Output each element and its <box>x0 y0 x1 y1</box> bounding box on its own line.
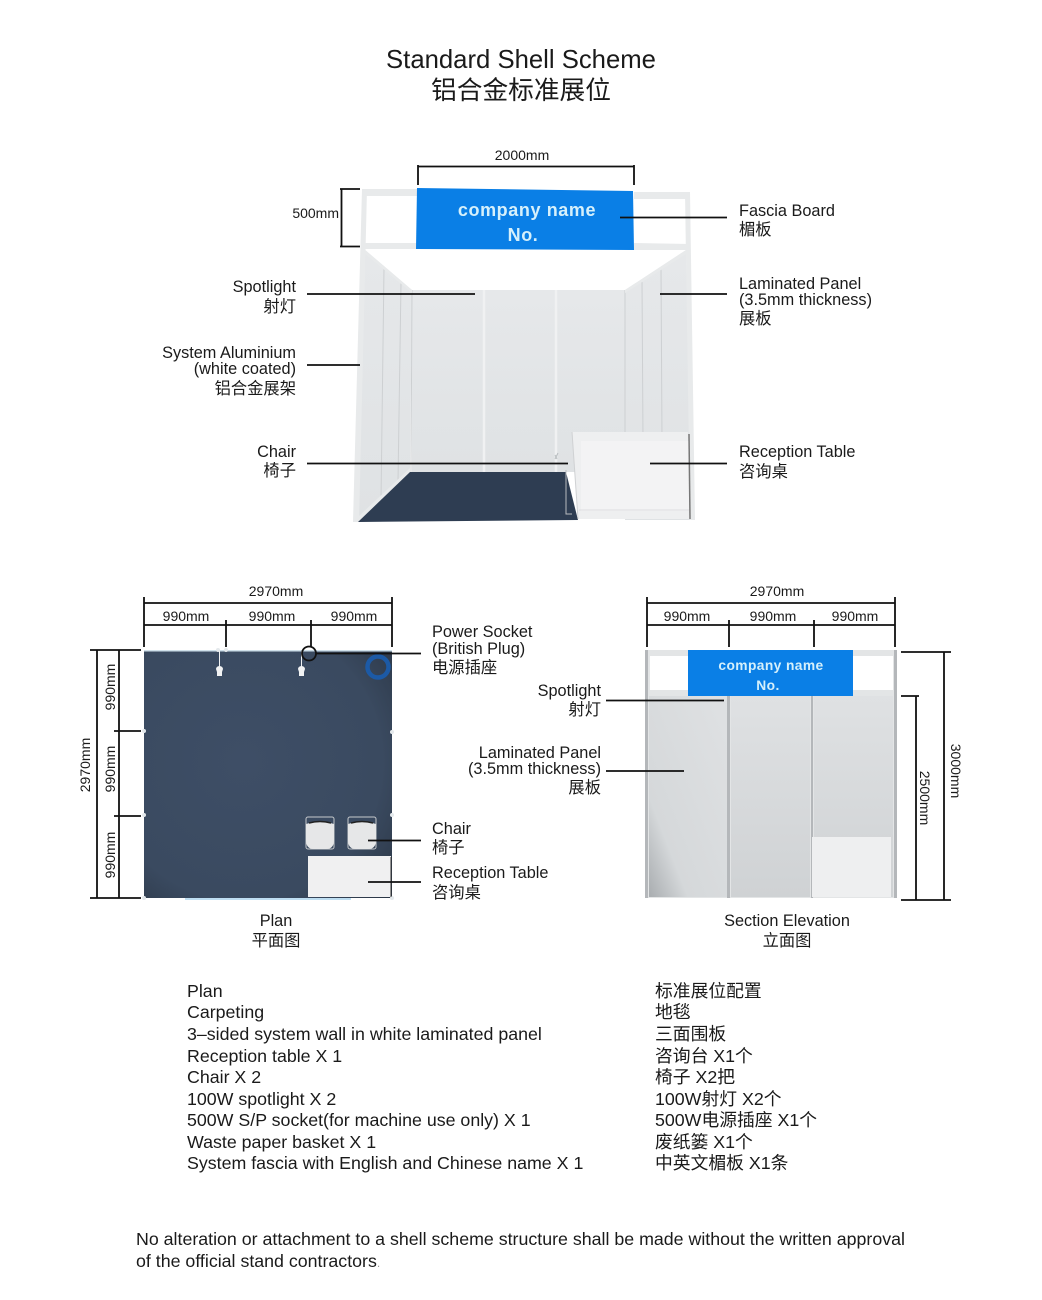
dimension: 2000mm <box>418 147 634 185</box>
dimension: 500mm <box>292 189 360 246</box>
plan caption <box>252 912 300 950</box>
chinese specification list: 废纸篓 X1个 <box>655 1132 753 1152</box>
footer note: No alteration or attachment to a shell scheme structure shall be made without the written approval <box>136 1229 905 1249</box>
label: fascia board: Fascia Board <box>739 202 835 220</box>
english specification list: Chair X 2 <box>187 1067 261 1087</box>
elevation fascia <box>688 650 853 696</box>
label: reception table <box>650 443 855 481</box>
label: power socket: (British Plug) <box>432 640 525 658</box>
elevation right dimensions <box>901 652 964 900</box>
label: system aluminium: 铝合金展架 <box>215 380 296 398</box>
label: chair: 椅子 <box>263 462 296 480</box>
chinese specification list: 椅子 X2把 <box>655 1067 735 1087</box>
label: elevation spotlight: Spotlight <box>538 682 601 700</box>
elevation right dimensions: 2500mm <box>917 771 933 825</box>
aluminium frame <box>353 189 695 522</box>
english specification list: Waste paper basket X 1 <box>187 1132 376 1152</box>
label: plan reception table: Reception Table <box>432 864 548 882</box>
elevation top dimensions: 990mm <box>832 608 878 624</box>
title: Standard Shell Scheme <box>386 46 656 74</box>
label: system aluminium <box>162 344 360 398</box>
label: fascia board: 楣板 <box>739 221 772 239</box>
plan top dimensions: 2970mm <box>249 583 303 599</box>
carpet <box>144 650 392 898</box>
label: laminated panel: (3.5mm thickness) <box>739 291 872 309</box>
label: power socket: Power Socket <box>432 623 533 641</box>
chinese specification list: 地毯 <box>655 1002 691 1022</box>
back wall <box>412 290 625 472</box>
plan top dimensions: 990mm <box>163 608 209 624</box>
elevation top dimensions: 2970mm <box>750 583 804 599</box>
fascia board banner: No. <box>508 225 538 245</box>
label: reception table: Reception Table <box>739 443 855 461</box>
chinese specification list: 标准展位配置 <box>655 981 762 1001</box>
elevation caption: Section Elevation <box>724 912 850 930</box>
title: 铝合金标准展位 <box>431 76 611 105</box>
plan left dimensions: 990mm <box>102 746 118 792</box>
label: elevation laminated panel: 展板 <box>568 779 601 797</box>
chinese specification list: 中英文楣板 X1条 <box>655 1153 789 1173</box>
label: plan reception table: 咨询桌 <box>432 884 481 902</box>
title <box>386 46 656 105</box>
label: laminated panel <box>660 275 872 328</box>
section elevation drawing: No. <box>756 678 780 693</box>
plan top dimensions: 990mm <box>249 608 295 624</box>
elevation caption <box>724 912 850 950</box>
elevation table <box>812 837 891 897</box>
plan left dimensions <box>77 650 141 898</box>
english specification list: Carpeting <box>187 1002 264 1022</box>
label: power socket: 电源插座 <box>432 659 497 677</box>
label: fascia board <box>620 202 835 239</box>
label: plan chair: 椅子 <box>432 839 465 857</box>
elevation right dimensions: 3000mm <box>948 744 964 798</box>
label: plan chair <box>368 820 471 857</box>
chinese specification list: 咨询台 X1个 <box>655 1046 753 1066</box>
chinese specification list: 100W射灯 X2个 <box>655 1089 782 1109</box>
plan caption: 平面图 <box>252 932 300 950</box>
plan top dimensions: 990mm <box>331 608 377 624</box>
chair right <box>348 817 376 849</box>
english specification list: 500W S/P socket(for machine use only) X 1 <box>187 1110 531 1130</box>
label: elevation laminated panel: Laminated Panel <box>479 744 601 762</box>
english specification list: System fascia with English and Chinese name X 1 <box>187 1153 583 1173</box>
panels <box>649 696 727 897</box>
label: elevation spotlight: 射灯 <box>568 701 601 719</box>
english specification list: Reception table X 1 <box>187 1046 342 1066</box>
label: laminated panel: 展板 <box>739 310 772 328</box>
elevation caption: 立面图 <box>763 932 811 950</box>
label: spotlight: 射灯 <box>263 298 296 316</box>
chair left <box>306 817 334 849</box>
section elevation drawing: company name <box>718 658 824 673</box>
plan left dimensions: 990mm <box>102 832 118 878</box>
footer note: of the official stand contractors. <box>136 1251 380 1271</box>
label: laminated panel: Laminated Panel <box>739 275 861 293</box>
plan top dimensions <box>144 583 392 647</box>
label: chair <box>257 443 568 480</box>
chinese specification list <box>655 981 817 1173</box>
footer note <box>136 1229 905 1271</box>
elevation top dimensions <box>647 583 895 647</box>
waste basket <box>368 656 388 678</box>
label: reception table: 咨询桌 <box>739 463 788 481</box>
fascia board banner <box>416 188 634 250</box>
english specification list <box>187 981 583 1173</box>
english specification list: 100W spotlight X 2 <box>187 1089 336 1109</box>
chinese specification list: 三面围板 <box>655 1024 726 1044</box>
dimension: 2000mm: 2000mm <box>495 147 549 163</box>
label: plan chair: Chair <box>432 820 471 838</box>
label: plan reception table <box>368 864 548 902</box>
english specification list: 3–sided system wall in white laminated panel <box>187 1024 542 1044</box>
section elevation drawing <box>645 650 897 898</box>
label: spotlight: Spotlight <box>233 278 296 296</box>
label: elevation spotlight <box>538 682 724 719</box>
reception table <box>572 432 690 519</box>
left side wall <box>357 249 412 522</box>
label: spotlight <box>233 278 475 316</box>
dimension: 500mm: 500mm <box>292 205 339 221</box>
carpet floor <box>358 472 578 522</box>
fascia board banner: company name <box>458 200 596 220</box>
label: elevation laminated panel <box>468 744 684 797</box>
spotlight left <box>216 651 223 676</box>
booth perspective illustration <box>353 189 695 522</box>
label: power socket <box>302 623 533 677</box>
label: system aluminium: (white coated) <box>194 360 296 378</box>
label: system aluminium: System Aluminium <box>162 344 296 362</box>
elevation top dimensions: 990mm <box>664 608 710 624</box>
table <box>308 856 391 897</box>
right side wall <box>625 250 692 520</box>
elevation top dimensions: 990mm <box>750 608 796 624</box>
chinese specification list: 500W电源插座 X1个 <box>655 1110 817 1130</box>
plan drawing <box>142 648 394 900</box>
chair outline <box>555 453 572 514</box>
english specification list: Plan <box>187 981 223 1001</box>
wall panel joints <box>381 268 662 500</box>
plan posts <box>142 648 394 900</box>
plan left dimensions: 2970mm <box>77 738 93 792</box>
fascia opening <box>650 656 688 690</box>
spotlight right <box>298 651 305 676</box>
plan left dimensions: 990mm <box>102 664 118 710</box>
label: elevation laminated panel: (3.5mm thickness) <box>468 760 601 778</box>
plan caption: Plan <box>260 912 292 930</box>
label: chair: Chair <box>257 443 297 461</box>
